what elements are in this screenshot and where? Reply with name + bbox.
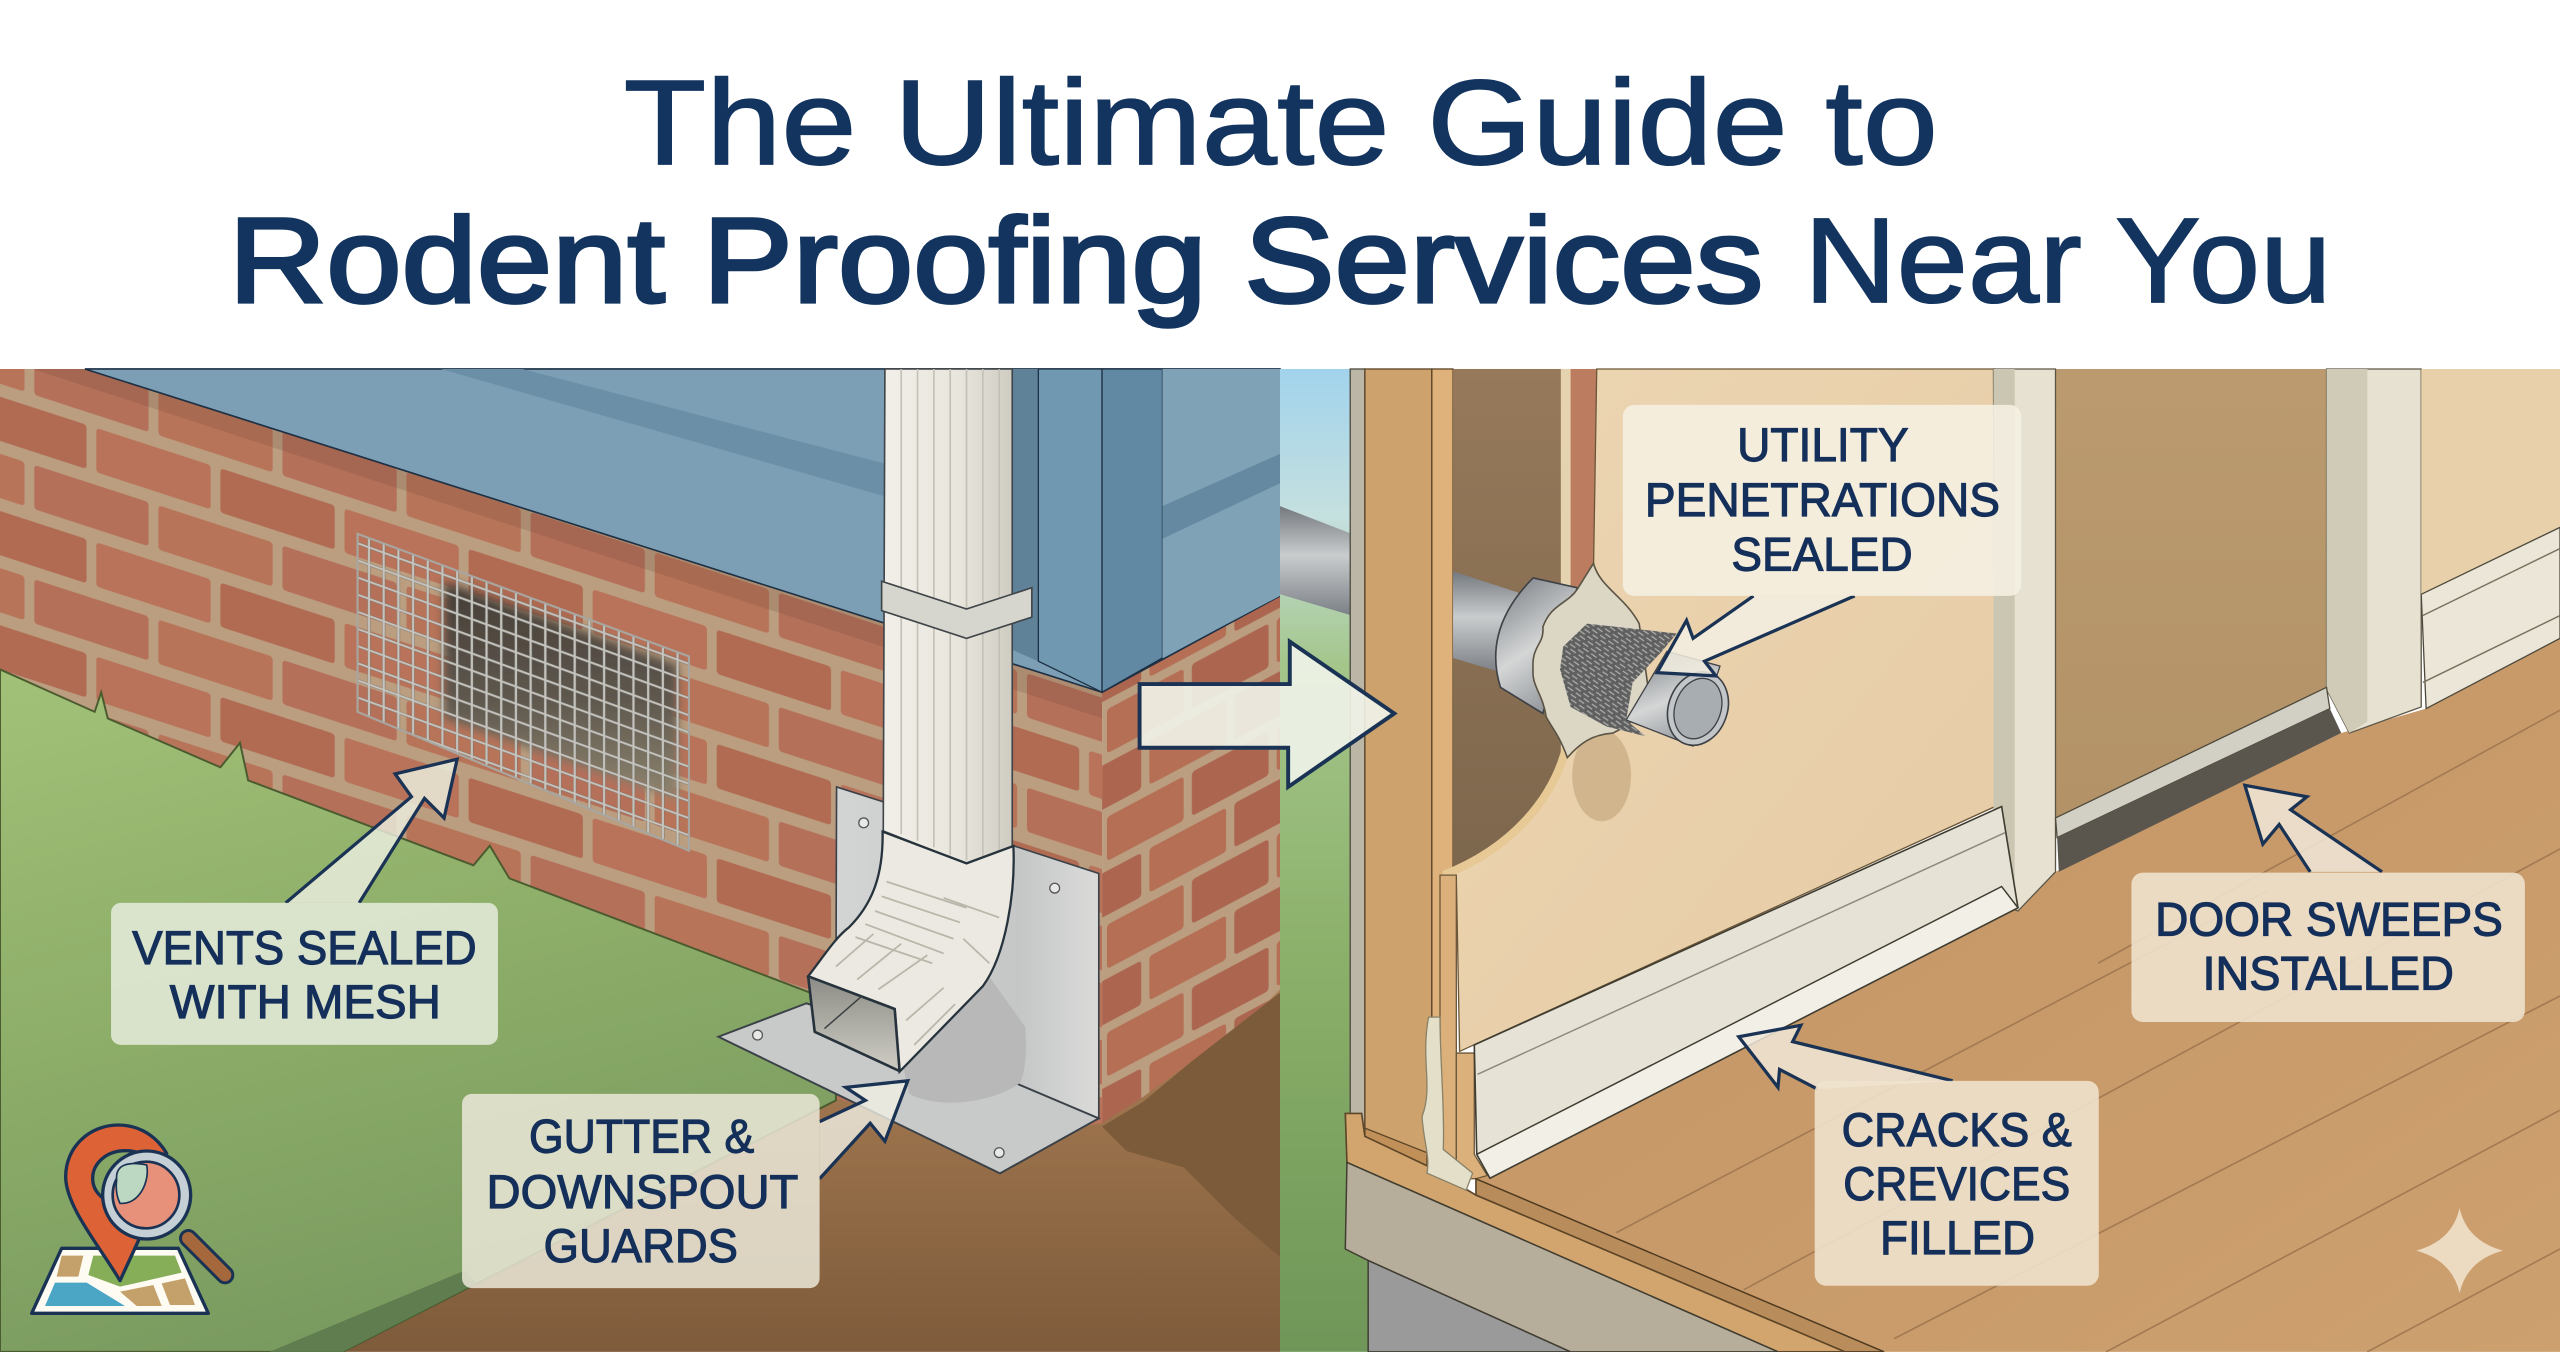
cut drywall <box>1443 369 1995 1051</box>
grass <box>0 669 836 1352</box>
arrow: to pipe <box>1657 596 1855 676</box>
drywall edge <box>1440 875 1456 1169</box>
grass edge <box>269 1270 477 1352</box>
label box <box>1623 405 2021 596</box>
floorboard lines <box>1616 710 2560 1352</box>
door trim <box>1993 369 2421 911</box>
label text: INSTALLED <box>2202 947 2454 1000</box>
callout: utility penetrations sealed <box>1623 405 2021 676</box>
label text: WITH MESH <box>170 976 441 1029</box>
label text: DOOR SWEEPS <box>2155 894 2503 947</box>
label box <box>111 903 498 1045</box>
icon: sparkle <box>2416 1208 2503 1293</box>
caulk bead <box>1422 1017 1473 1190</box>
elbow ribs <box>836 882 999 1045</box>
title line 1: The Ultimate Guide to <box>624 55 1938 190</box>
far wall <box>2421 369 2560 594</box>
handle <box>188 1238 225 1275</box>
arrow: to vent <box>286 759 457 903</box>
label text: GUARDS <box>544 1220 738 1273</box>
title <box>229 55 2331 328</box>
outlet <box>808 976 900 1071</box>
elbow <box>808 832 1014 1072</box>
panel: exterior scene <box>0 369 1280 1352</box>
downspout <box>808 369 1032 1072</box>
label text <box>2155 894 2503 1000</box>
label text: UTILITY <box>1737 419 1909 472</box>
label text <box>132 922 477 1029</box>
wall frame <box>1350 369 1453 1172</box>
label text: FILLED <box>1880 1212 2035 1265</box>
label box <box>462 1094 820 1288</box>
brick shadow band <box>33 369 1102 718</box>
label box <box>2131 873 2525 1022</box>
foundation <box>1345 1162 1778 1352</box>
arrow: to baseboard <box>1739 1025 1953 1089</box>
brick wall right <box>1102 596 1280 1143</box>
siding <box>85 369 1280 692</box>
title line 2: Rodent Proofing Services <box>229 193 1763 328</box>
callout: gutter and downspout guards <box>462 1081 908 1288</box>
metal guard plate <box>718 787 1099 1173</box>
floor edge board <box>1476 1179 1884 1352</box>
sealed pipe <box>1453 563 1738 821</box>
label box <box>1815 1081 2099 1286</box>
lens <box>103 1151 191 1239</box>
title line 2 <box>229 193 2331 328</box>
panel: interior scene <box>1280 369 2560 1352</box>
title line 2: Near You <box>1804 193 2331 328</box>
label text: DOWNSPOUT <box>487 1166 798 1219</box>
strap <box>882 581 1032 638</box>
dark soil patch <box>1102 993 1280 1257</box>
label text: SEALED <box>1731 529 1913 582</box>
callout: door sweeps installed <box>2131 785 2525 1022</box>
far baseboard <box>2421 527 2560 709</box>
baseboard end <box>1456 1053 1487 1179</box>
map <box>32 1248 208 1313</box>
door <box>2056 369 2327 818</box>
label text <box>1842 1104 2072 1265</box>
brick wall left <box>0 369 1102 1143</box>
interior brick strip <box>1561 369 1597 761</box>
icon: map pin with magnifier <box>32 1125 225 1313</box>
callout: cracks and crevices filled <box>1739 1025 2099 1286</box>
sky and yard <box>1280 369 1371 1352</box>
exterior pipe <box>1280 506 1352 616</box>
baseboard <box>1474 807 2018 1178</box>
arrow: before to after <box>1140 642 1394 787</box>
wall cavity <box>1453 369 1571 891</box>
arrow: to guard <box>820 1081 908 1179</box>
label text: CRACKS & <box>1842 1104 2072 1157</box>
door sweep <box>2056 687 2341 872</box>
vent with mesh <box>358 534 689 851</box>
label text: GUTTER & <box>529 1111 754 1164</box>
label text: VENTS SEALED <box>132 922 477 975</box>
arrow: to sweep <box>2245 785 2382 872</box>
pin <box>66 1125 167 1281</box>
drywall cut edge <box>1443 743 1567 875</box>
soil <box>343 989 1280 1352</box>
sill <box>1345 1113 1845 1352</box>
label text <box>487 1111 798 1273</box>
label text: PENETRATIONS <box>1645 474 2000 527</box>
floor <box>1476 638 2560 1352</box>
callout: vents sealed with mesh <box>111 759 498 1045</box>
label text: CREVICES <box>1843 1158 2070 1211</box>
label text <box>1645 419 2000 582</box>
